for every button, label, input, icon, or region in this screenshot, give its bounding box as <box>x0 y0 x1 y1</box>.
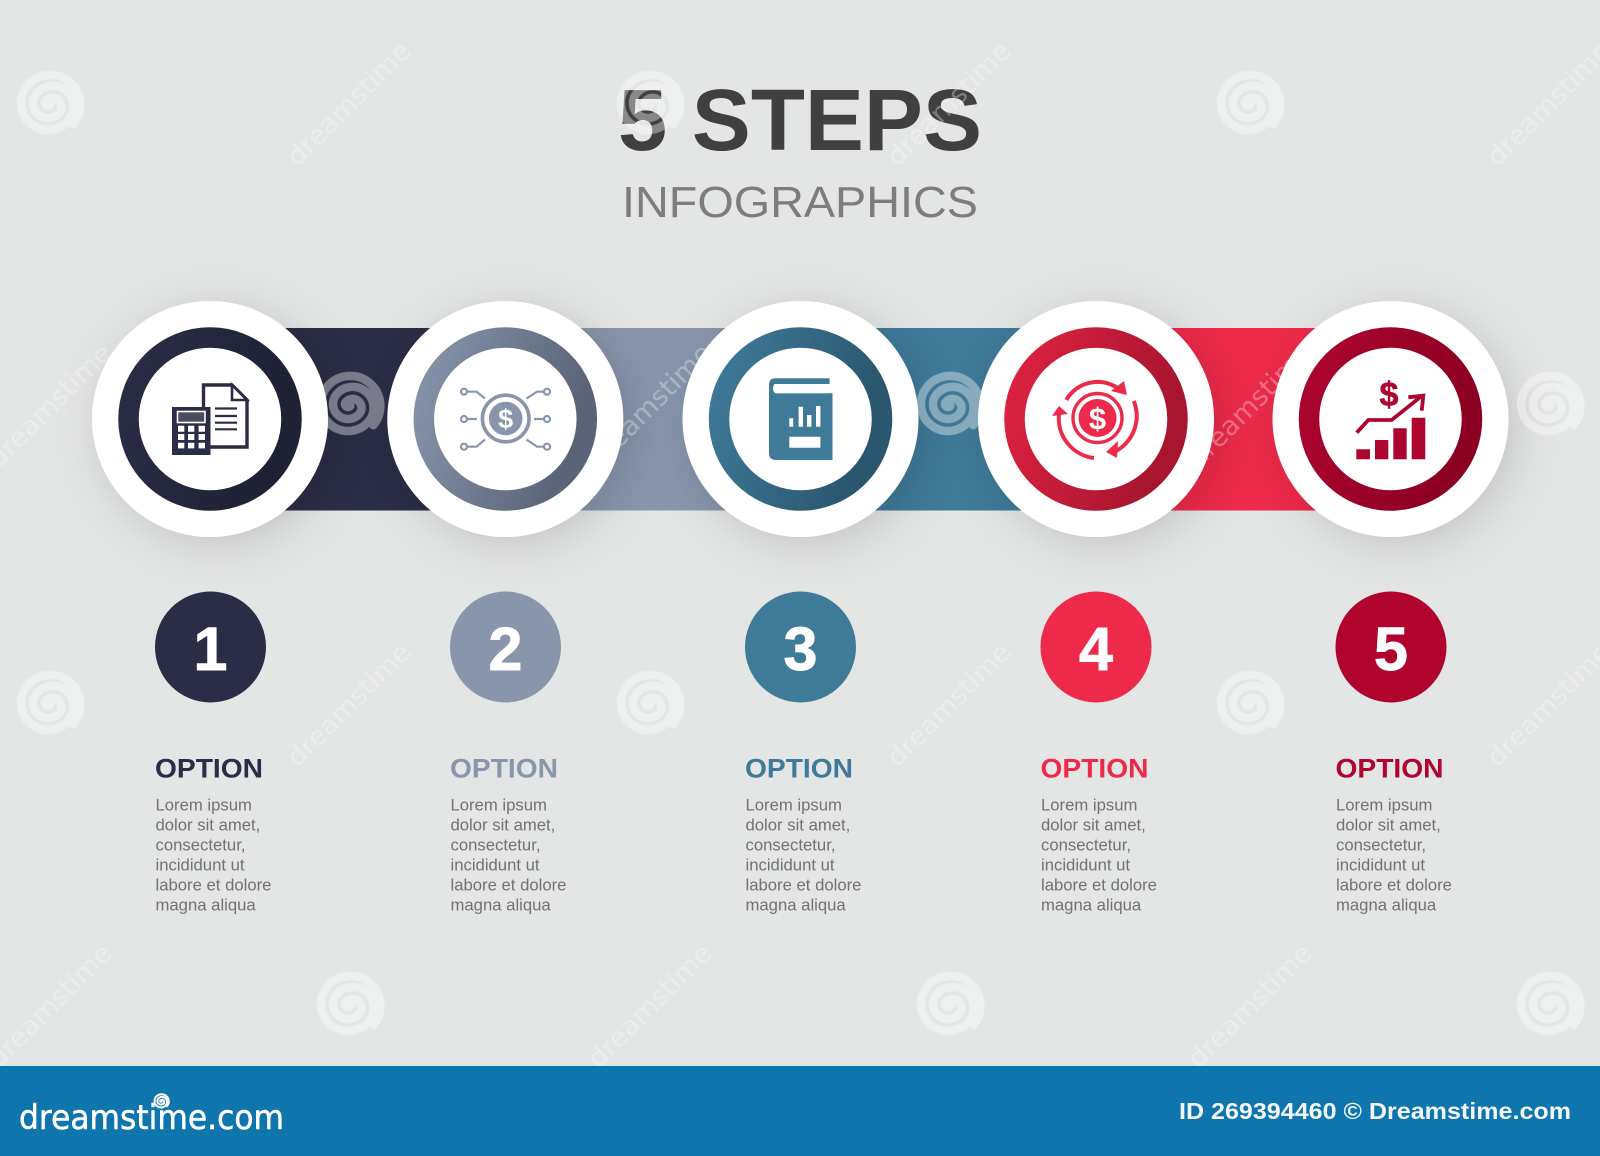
watermark text: dreamstime <box>881 36 1017 172</box>
body 3: incididunt ut <box>746 856 835 874</box>
watermark text: dreamstime <box>281 637 417 773</box>
step 3 text <box>745 592 861 914</box>
step 1 circle <box>92 301 328 537</box>
number badge 2: 2 <box>489 615 522 683</box>
body 3: magna aliqua <box>746 896 846 914</box>
body 1: magna aliqua <box>156 896 256 914</box>
body 4: labore et dolore <box>1041 876 1157 894</box>
step 4 circle <box>978 301 1214 537</box>
title: 5 STEPS <box>618 72 982 169</box>
body 2: labore et dolore <box>450 876 566 894</box>
step 2 text <box>450 592 566 914</box>
body 4: magna aliqua <box>1041 896 1142 914</box>
number badge 5 <box>1336 592 1446 702</box>
connecting band <box>210 328 1391 510</box>
number badge 2 <box>450 592 561 702</box>
number badge 1 <box>155 592 266 702</box>
watermark text: dreamstime <box>881 637 1017 773</box>
footer credit: ID 269394460 © Dreamstime.com <box>1179 1098 1571 1124</box>
watermark text: dreamstime <box>1182 338 1318 474</box>
number badge 1: 1 <box>194 615 227 683</box>
number badge 4: 4 <box>1079 615 1113 683</box>
body 5: Lorem ipsum <box>1336 796 1432 814</box>
icon: book with chart <box>769 378 832 460</box>
icon: growth chart with dollar: $ <box>1380 376 1399 414</box>
step 5 text <box>1336 592 1452 914</box>
body 3: consectetur, <box>746 836 835 854</box>
watermark text: dreamstime <box>281 36 417 172</box>
watermark text: dreamstime <box>1182 938 1318 1074</box>
body 1: dolor sit amet, <box>156 816 260 834</box>
icon: dollar network <box>461 389 550 450</box>
body 3: dolor sit amet, <box>746 816 850 834</box>
icon: dollar with cycle arrows: $ <box>1089 401 1106 436</box>
step 2 circle <box>387 301 623 537</box>
body 5: magna aliqua <box>1336 896 1437 914</box>
body 5: consectetur, <box>1336 836 1426 854</box>
body 1: Lorem ipsum <box>156 796 252 814</box>
step 5 circle <box>1272 301 1508 537</box>
step 3 circle <box>682 301 918 537</box>
heading 1: OPTION <box>155 754 263 784</box>
body 5: dolor sit amet, <box>1336 816 1441 834</box>
step 4 text <box>1040 592 1157 914</box>
body 3: Lorem ipsum <box>746 796 842 814</box>
icon: dollar network: $ <box>498 404 513 434</box>
body 2: dolor sit amet, <box>450 816 555 834</box>
body 5: labore et dolore <box>1336 876 1452 894</box>
watermark text: dreamstime <box>582 938 718 1074</box>
body 4: dolor sit amet, <box>1041 816 1146 834</box>
heading 2: OPTION <box>450 754 558 784</box>
footer bar <box>0 1066 1600 1156</box>
body 1: consectetur, <box>156 836 245 854</box>
number badge 5: 5 <box>1374 615 1408 683</box>
number badge 3 <box>745 592 856 702</box>
step 1 text <box>155 592 271 914</box>
body 1: labore et dolore <box>156 876 271 894</box>
subtitle: INFOGRAPHICS <box>622 179 978 227</box>
icon: dollar with cycle arrows <box>1052 381 1137 458</box>
number badge 3: 3 <box>784 615 817 683</box>
body 2: magna aliqua <box>450 896 551 914</box>
icon: growth chart with dollar <box>1356 376 1425 459</box>
body 2: consectetur, <box>450 836 540 854</box>
body 4: consectetur, <box>1041 836 1131 854</box>
watermark text: dreamstime <box>582 338 718 474</box>
heading 4: OPTION <box>1040 754 1148 784</box>
body 2: Lorem ipsum <box>450 796 547 814</box>
heading 3: OPTION <box>745 754 853 784</box>
body 1: incididunt ut <box>156 856 245 874</box>
heading 5: OPTION <box>1336 754 1444 784</box>
footer logo: dreamstime.com <box>19 1098 284 1138</box>
body 4: incididunt ut <box>1041 856 1130 874</box>
body 3: labore et dolore <box>746 876 861 894</box>
icon: calculator and document <box>172 385 247 455</box>
body 5: incididunt ut <box>1336 856 1425 874</box>
body 4: Lorem ipsum <box>1041 796 1137 814</box>
number badge 4 <box>1040 592 1152 702</box>
body 2: incididunt ut <box>450 856 540 874</box>
